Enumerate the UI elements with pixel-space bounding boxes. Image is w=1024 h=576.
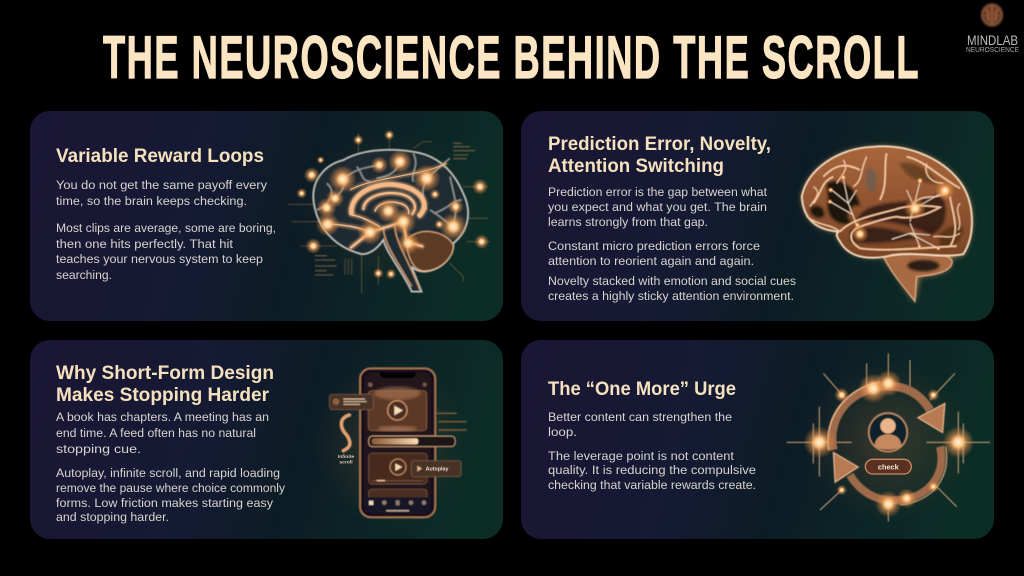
body text: end time. A feed often has no natural [56,426,256,440]
body text: Prediction error is the gap between what [548,185,768,199]
body text: Novelty stacked with emotion and social cues [548,274,796,288]
body text: You do not get the same payoff every [56,178,268,192]
body text: Autoplay, infinite scroll, and rapid loading [56,466,280,480]
heading: Makes Stopping Harder [56,384,269,406]
body text: you expect and what you get. The brain [548,200,767,214]
body text: remove the pause where choice commonly [56,481,286,495]
logo: MindLab Neuroscience [966,4,1019,54]
icon: phone with feed [313,360,467,527]
check pill [865,459,911,474]
logo subtitle: NEUROSCIENCE [966,47,1019,54]
body text [56,410,286,524]
body text [548,185,796,303]
body text: forms. Low friction makes starting easy [56,496,274,510]
body text: The leverage point is not content [548,449,735,463]
panel: variable reward loops [30,111,503,321]
body text: stopping cue. [56,442,141,456]
panel: short-form design [30,340,503,539]
body text: checking that variable rewards create. [548,478,756,492]
heading: Variable Reward Loops [56,145,264,167]
body text: teaches your nervous system to keep [56,252,263,266]
heading [548,133,771,177]
icon: glowing brain with nodes [288,130,490,293]
icon: check loop [787,353,990,522]
heading: Why Short-Form Design [56,362,274,384]
heading: Prediction Error, Novelty, [548,133,771,155]
body text: attention to reorient again and again. [548,254,754,268]
body text: learns strongly from that gap. [548,215,708,229]
body text: Better content can strengthen the [548,410,732,424]
autoplay label: Autoplay [426,467,448,473]
body text: quality. It is reducing the compulsive [548,463,756,477]
infinite scroll label: Infinite [338,454,354,460]
body text: Constant micro prediction errors force [548,239,760,253]
body text: A book has chapters. A meeting has an [56,410,269,424]
body text: loop. [548,425,577,439]
body text: Most clips are average, some are boring, [56,221,276,235]
heading: Attention Switching [548,155,724,177]
body text: searching. [56,268,112,282]
body text: time, so the brain keeps checking. [56,194,247,208]
body text: and stopping harder. [56,510,169,524]
panel: prediction error [521,111,994,321]
check pill: check [878,462,900,471]
body text [56,178,276,282]
body text: then one hits perfectly. That hit [56,237,234,251]
heading: The “One More” Urge [548,378,736,400]
body text [548,410,756,492]
body text: creates a highly sticky attention environment. [548,289,794,303]
icon: phone with feed: scroll [339,460,353,466]
icon: logo brain [982,4,1002,26]
panel: one more urge [521,340,994,539]
heading [56,362,274,406]
icon: copper brain [802,146,972,302]
